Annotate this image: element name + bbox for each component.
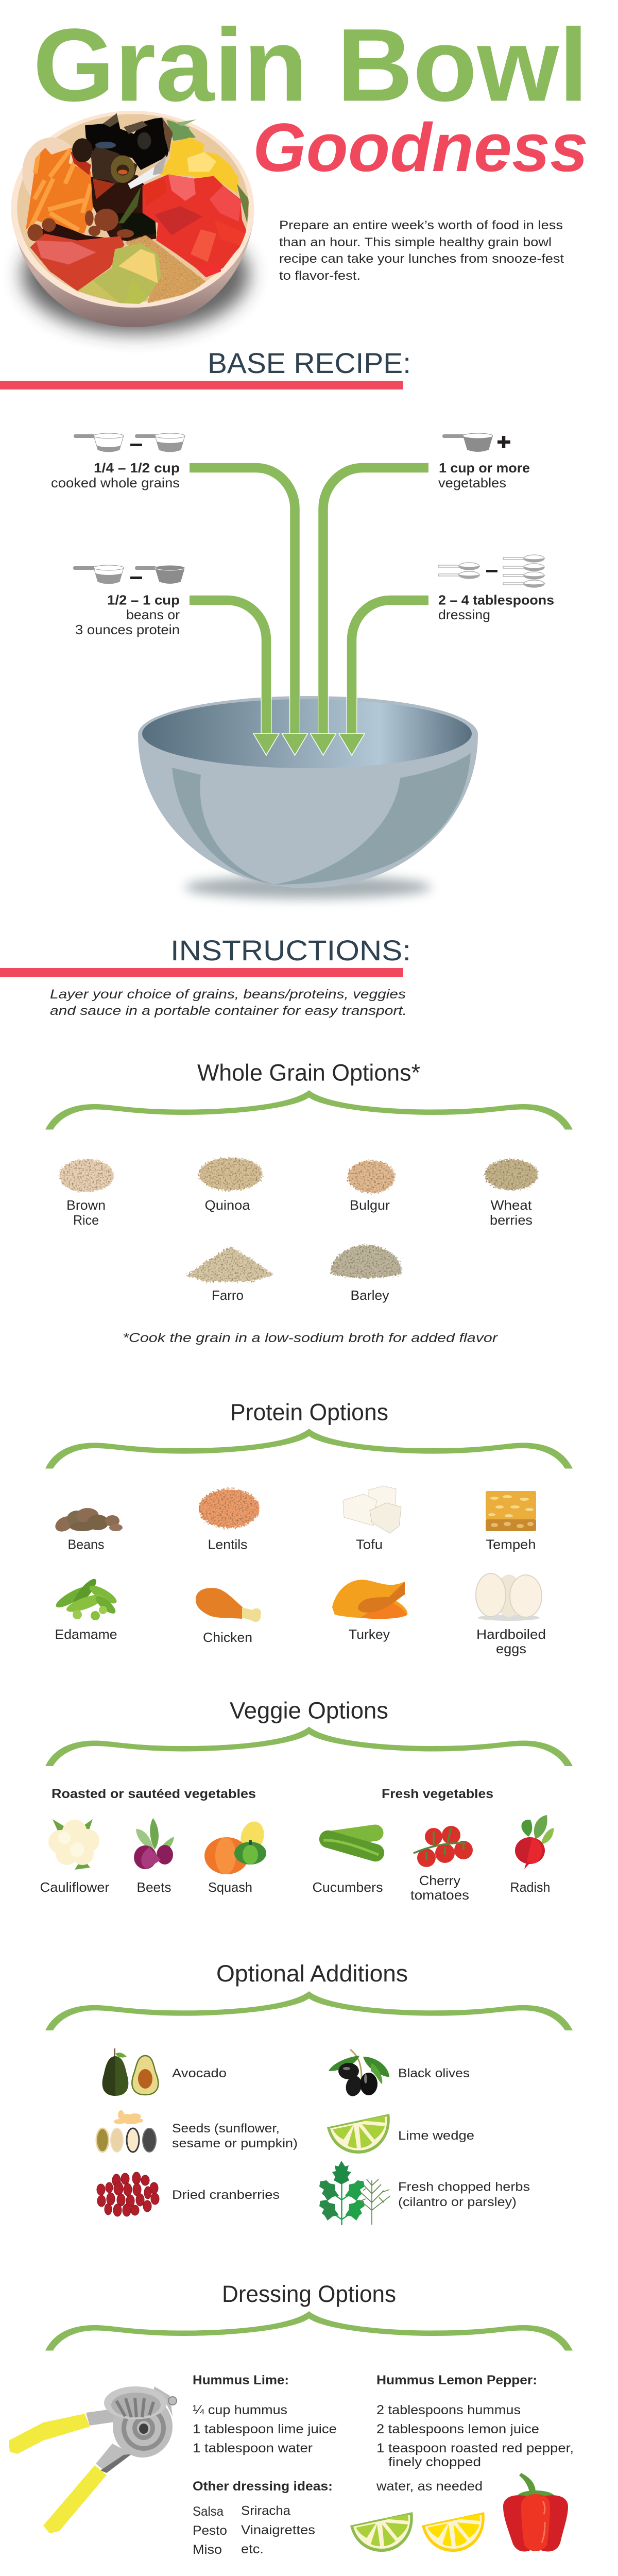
recipe: hummus lemon pepper bbox=[376, 2373, 574, 2494]
panel: veggie options bbox=[40, 1697, 573, 1903]
label: protein amount bbox=[75, 592, 180, 637]
item: turkey bbox=[332, 1580, 407, 1642]
recipe: hummus lime: ¼ cup hummus bbox=[193, 2403, 287, 2417]
label: protein amount: 3 ounces protein bbox=[75, 622, 180, 637]
item: squash bbox=[204, 1819, 267, 1895]
intro text: recipe can take your lunches from snooze-fest bbox=[279, 252, 564, 266]
label: seeds: Seeds (sunflower, bbox=[172, 2122, 280, 2136]
icon: measuring cups one half to one bbox=[73, 565, 185, 584]
label: lime wedge: Lime wedge bbox=[398, 2129, 474, 2143]
recipe: hummus lime: 1 tablespoon lime juice bbox=[193, 2422, 337, 2436]
recipe: hummus lemon pepper: 2 tablespoons hummus bbox=[376, 2403, 521, 2417]
label: grains amount: cooked whole grains bbox=[51, 475, 180, 490]
red bar under instructions bbox=[0, 968, 403, 977]
list: other dressing ideas bbox=[193, 2479, 333, 2557]
item: beets bbox=[134, 1818, 174, 1895]
item: tempeh: Tempeh bbox=[486, 1536, 536, 1552]
item: bulgur: Bulgur bbox=[350, 1197, 390, 1213]
intro text: than an hour. This simple healthy grain bowl bbox=[279, 235, 552, 249]
label: protein amount: beans or bbox=[126, 607, 180, 622]
item: wheat berries: Wheat bbox=[490, 1197, 532, 1213]
heading: veggie options: Veggie Options bbox=[230, 1697, 388, 1724]
item: cherry tomatoes: Cherry bbox=[419, 1873, 460, 1888]
recipe: hummus lime: Hummus Lime: bbox=[193, 2373, 289, 2387]
icon: red pepper bbox=[503, 2473, 568, 2551]
red bar under base recipe bbox=[0, 381, 403, 389]
icon: measuring cup plus bbox=[442, 433, 510, 452]
list: other dressing ideas: etc. bbox=[241, 2542, 264, 2556]
label: dried cranberries: Dried cranberries bbox=[172, 2188, 280, 2202]
label: black olives: Black olives bbox=[398, 2066, 470, 2080]
item: quinoa: Quinoa bbox=[205, 1197, 250, 1213]
item: brown rice: Rice bbox=[73, 1212, 99, 1228]
item: hardboiled eggs bbox=[476, 1573, 546, 1656]
label: vegetables amount: vegetables bbox=[438, 475, 506, 490]
icon: avocado bbox=[102, 2048, 158, 2096]
photo: grain bowl from above bbox=[11, 111, 254, 333]
panel: optional additions bbox=[45, 1960, 573, 2225]
arrow: protein to bowl bbox=[190, 600, 279, 755]
item: tempeh bbox=[486, 1491, 536, 1552]
item: hardboiled eggs: Hardboiled bbox=[476, 1626, 546, 1642]
heading: protein options: Protein Options bbox=[230, 1399, 388, 1425]
brace bbox=[45, 1727, 573, 1766]
brace bbox=[45, 1090, 573, 1129]
item: radish bbox=[510, 1815, 554, 1895]
heading: dressing options: Dressing Options bbox=[222, 2281, 396, 2307]
item: beans bbox=[53, 1508, 123, 1552]
recipe: hummus lemon pepper: finely chopped bbox=[388, 2455, 481, 2469]
label: protein amount: 1/2 – 1 cup bbox=[107, 592, 180, 608]
item: radish: Radish bbox=[510, 1879, 550, 1895]
label: fresh herbs: (cilantro or parsley) bbox=[398, 2195, 517, 2209]
item: edamame bbox=[54, 1576, 119, 1642]
icon: mixing bowl bbox=[138, 696, 478, 899]
recipe: hummus lemon pepper: 1 teaspoon roasted red pepper, bbox=[376, 2441, 574, 2455]
item: tofu bbox=[343, 1486, 401, 1552]
item: cherry tomatoes: tomatoes bbox=[410, 1887, 469, 1903]
item: cucumbers: Cucumbers bbox=[312, 1879, 383, 1895]
item: turkey: Turkey bbox=[349, 1626, 390, 1642]
icon: measuring cups one quarter to one half bbox=[74, 433, 185, 452]
heading: optional additions: Optional Additions bbox=[216, 1960, 408, 1987]
item: lentils bbox=[199, 1489, 260, 1552]
item: tofu: Tofu bbox=[356, 1536, 383, 1552]
intro text: Prepare an entire week’s worth of food in less bbox=[279, 218, 563, 232]
heading: base recipe: BASE RECIPE: bbox=[208, 347, 411, 379]
brace bbox=[45, 1429, 573, 1469]
item: cauliflower bbox=[40, 1819, 110, 1895]
label: fresh herbs bbox=[398, 2180, 530, 2209]
intro text: to flavor-fest. bbox=[279, 269, 360, 283]
instructions text bbox=[50, 987, 407, 1018]
item: chicken: Chicken bbox=[203, 1630, 252, 1645]
brace bbox=[45, 2311, 573, 2350]
item: edamame: Edamame bbox=[55, 1626, 117, 1642]
item: cucumbers bbox=[312, 1823, 386, 1895]
item: farro: Farro bbox=[212, 1287, 244, 1303]
icon: lime wedge bbox=[327, 2114, 390, 2154]
list: other dressing ideas: Sriracha bbox=[241, 2504, 290, 2518]
label: dressing amount bbox=[438, 592, 554, 622]
icon: black olives bbox=[329, 2049, 389, 2098]
label: vegetables amount: 1 cup or more bbox=[439, 460, 530, 476]
label: seeds: sesame or pumpkin) bbox=[172, 2137, 298, 2150]
label: avocado: Avocado bbox=[172, 2066, 227, 2080]
arrow: whole grains to bowl bbox=[190, 468, 308, 755]
label: fresh herbs: Fresh chopped herbs bbox=[398, 2180, 530, 2194]
label: dressing amount: dressing bbox=[438, 607, 490, 622]
brace bbox=[45, 1991, 573, 2030]
panel: dressing options bbox=[9, 2281, 574, 2557]
item: quinoa bbox=[199, 1158, 263, 1213]
title: Goodness: Goodness bbox=[253, 110, 588, 186]
label: grains amount bbox=[51, 460, 180, 490]
item: brown rice bbox=[59, 1159, 114, 1228]
list: other dressing ideas: Miso bbox=[193, 2543, 222, 2557]
item: beets: Beets bbox=[137, 1879, 171, 1895]
subheading: roasted: Roasted or sautéed vegetables bbox=[52, 1787, 256, 1801]
item: hardboiled eggs: eggs bbox=[496, 1641, 526, 1656]
list: other dressing ideas: Vinaigrettes bbox=[241, 2523, 315, 2537]
footnote: *Cook the grain in a low-sodium broth for added flavor bbox=[123, 1331, 499, 1345]
recipe: hummus lemon pepper: water, as needed bbox=[376, 2479, 483, 2494]
heading: whole grain options: Whole Grain Options* bbox=[197, 1059, 420, 1086]
label: barley: Barley bbox=[350, 1287, 389, 1303]
item: barley bbox=[331, 1245, 402, 1278]
icon: dried cranberries bbox=[97, 2172, 159, 2216]
item: lentils: Lentils bbox=[208, 1536, 247, 1552]
title: Grain Bowl: Grain Bowl bbox=[33, 7, 588, 123]
icon: citrus juicer bbox=[9, 2386, 177, 2533]
recipe: hummus lemon pepper: Hummus Lemon Pepper: bbox=[376, 2373, 537, 2387]
list: other dressing ideas: Pesto bbox=[193, 2523, 227, 2538]
label: vegetables amount bbox=[438, 460, 530, 490]
label: grains amount: 1/4 – 1/2 cup bbox=[94, 460, 180, 476]
recipe: hummus lime bbox=[193, 2373, 337, 2455]
item: brown rice: Brown bbox=[66, 1197, 106, 1213]
item: wheat berries: berries bbox=[490, 1212, 533, 1228]
instructions text: and sauce in a portable container for easy transport. bbox=[50, 1004, 407, 1018]
icon: lime slice bbox=[350, 2512, 413, 2552]
arrow: vegetables to bowl bbox=[310, 468, 428, 755]
list: other dressing ideas: Other dressing ideas: bbox=[193, 2479, 333, 2494]
item: bulgur bbox=[348, 1160, 395, 1213]
item: farro bbox=[186, 1247, 274, 1303]
recipe: hummus lime: 1 tablespoon water bbox=[193, 2441, 313, 2455]
instructions text: Layer your choice of grains, beans/proteins, veggies bbox=[50, 987, 406, 1002]
label: seeds bbox=[172, 2122, 298, 2150]
recipe: hummus lemon pepper: 2 tablespoons lemon juice bbox=[376, 2422, 539, 2436]
item: beans: Beans bbox=[68, 1536, 104, 1552]
arrow: dressing to bowl bbox=[339, 600, 428, 755]
label: dressing amount: 2 – 4 tablespoons bbox=[438, 592, 554, 608]
icon: seeds bbox=[96, 2110, 156, 2152]
list: other dressing ideas: Salsa bbox=[193, 2504, 224, 2519]
panel: protein options bbox=[45, 1399, 573, 1656]
panel: whole grain options bbox=[45, 1059, 573, 1345]
item: squash: Squash bbox=[208, 1879, 252, 1895]
subheading: fresh: Fresh vegetables bbox=[382, 1787, 493, 1801]
icon: tablespoons bbox=[438, 555, 544, 587]
heading: instructions: INSTRUCTIONS: bbox=[170, 934, 411, 967]
item: cherry tomatoes bbox=[410, 1826, 473, 1903]
item: wheat berries bbox=[485, 1159, 538, 1228]
icon: lemon slice bbox=[422, 2512, 485, 2552]
item: cauliflower: Cauliflower bbox=[40, 1879, 110, 1895]
icon: fresh herbs bbox=[319, 2161, 390, 2225]
intro text bbox=[279, 218, 564, 283]
item: chicken bbox=[196, 1588, 261, 1645]
